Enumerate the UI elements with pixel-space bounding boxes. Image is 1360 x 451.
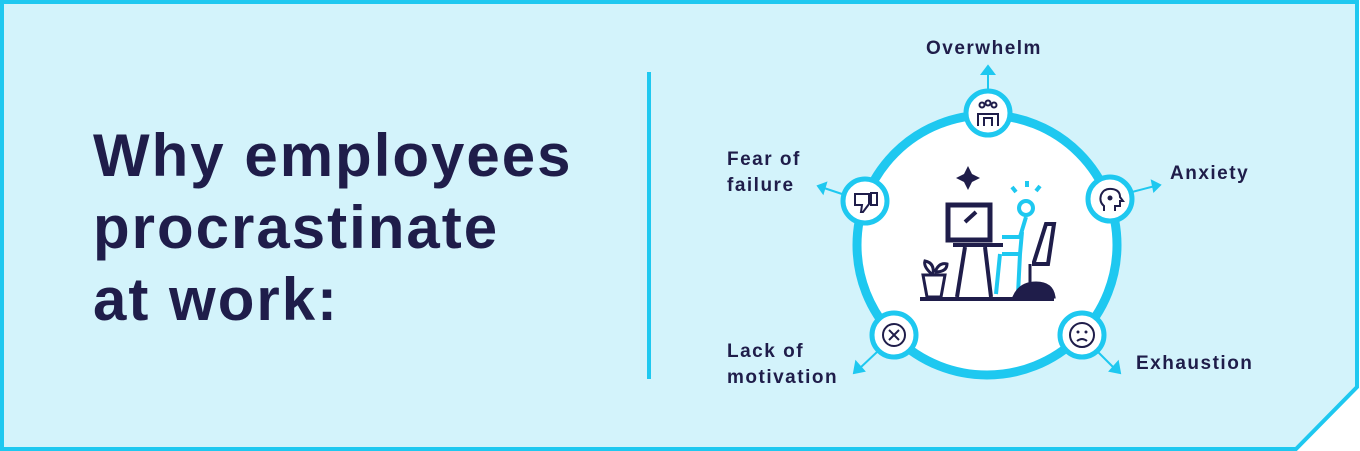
label: fear of failure <box>727 149 801 196</box>
title: procrastinate <box>93 194 499 261</box>
arrows <box>818 66 1160 373</box>
label: anxiety: Anxiety <box>1170 163 1249 184</box>
node: fear <box>843 179 887 223</box>
title: at work: <box>93 266 339 333</box>
label: lack of motivation: motivation <box>727 367 838 388</box>
divider <box>647 72 651 379</box>
label: fear of failure: failure <box>727 175 795 196</box>
label: overwhelm: Overwhelm <box>926 38 1042 59</box>
ring <box>857 115 1117 375</box>
node: anxiety <box>1088 177 1132 221</box>
illustration: person at desk <box>920 166 1054 301</box>
label: fear of failure: Fear of <box>727 149 801 170</box>
title <box>93 122 572 333</box>
node: lack of motivation <box>872 313 916 357</box>
label: exhaustion: Exhaustion <box>1136 353 1253 374</box>
node: overwhelm <box>966 91 1010 135</box>
node: exhaustion <box>1060 313 1104 357</box>
label: lack of motivation <box>727 341 838 388</box>
label: lack of motivation: Lack of <box>727 341 804 362</box>
title: Why employees <box>93 122 572 189</box>
